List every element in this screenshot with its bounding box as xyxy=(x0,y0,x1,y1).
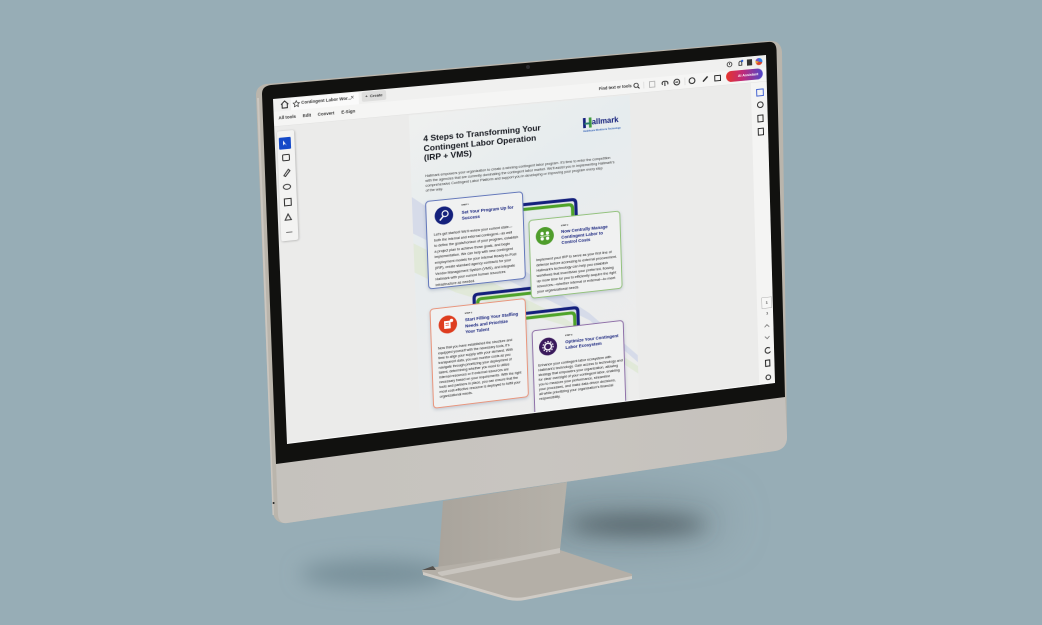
selected tool xyxy=(279,137,291,150)
avatar xyxy=(755,58,763,65)
top tab bar xyxy=(273,55,766,112)
step heading: Control Costs xyxy=(561,237,590,245)
card: step 1 xyxy=(425,191,526,290)
logo H mark xyxy=(582,117,592,128)
create tab xyxy=(362,90,386,102)
step text: Vendor Management System (VMS), and integrate xyxy=(435,263,515,276)
step heading: Success xyxy=(462,214,480,220)
step text: workflows that incentivize your preferred, flowing xyxy=(537,265,614,278)
card: step 3 xyxy=(429,298,529,409)
page number box xyxy=(761,297,772,309)
step text: Hallmark's technology can help you establish xyxy=(536,261,608,273)
step heading: Optimize Your Contingent xyxy=(565,333,618,344)
step label: STEP 3 xyxy=(465,311,472,315)
webcam xyxy=(526,65,530,69)
step text: transparent data, you can monitor costs as you xyxy=(438,353,511,365)
floor shadows xyxy=(300,498,725,588)
step text: employment models for your Internal Ready-to-Post xyxy=(435,252,517,265)
monitor body xyxy=(256,41,787,523)
intro paragraph: of the way. xyxy=(426,187,443,193)
step text: Hallmark's technology. Gain access to technology and xyxy=(538,358,623,372)
connector arrows xyxy=(426,198,580,326)
step heading: Set Your Program Up for xyxy=(461,205,514,215)
step text: Implement your IRP to serve as your first line of xyxy=(536,250,612,262)
icon: star xyxy=(292,100,300,108)
find text: Find text or tools xyxy=(599,83,632,91)
step heading: Contingent Labor to xyxy=(561,230,603,239)
step text: to define the goals/horizon of your program, establish xyxy=(434,235,518,248)
step text: time to align your supply with your demand. With xyxy=(438,348,513,360)
step heading xyxy=(441,212,608,299)
step text: strategy that empowers your organization, allowing xyxy=(538,363,618,377)
menu bar: Convert xyxy=(318,110,334,117)
navigation icons xyxy=(764,324,772,380)
step text: a project plan to achieve those goals, and begin xyxy=(434,241,510,254)
step text xyxy=(434,212,518,287)
step text: for clear oversight of your contingent labor, enabling xyxy=(539,368,620,382)
step label: STEP 2 xyxy=(561,224,568,227)
step text: Hallmark with your current human resources xyxy=(435,269,505,281)
icon: home xyxy=(280,100,289,109)
create tab: + Create xyxy=(365,93,383,99)
right rail xyxy=(751,81,775,385)
title: 4 Steps to Transforming Your xyxy=(423,123,541,143)
step text: your organizational needs. xyxy=(537,285,579,294)
step text: navigate through prioritizing your deployment of xyxy=(439,358,512,370)
step heading xyxy=(565,333,619,350)
decorative background stripes xyxy=(412,198,638,374)
step heading xyxy=(461,205,514,220)
step heading: Now Centrally Manage xyxy=(561,224,608,234)
tab close: × xyxy=(350,94,354,101)
step heading: Start Filling Your Staffing xyxy=(465,311,518,322)
step text xyxy=(441,212,617,299)
step heading: Your Talent xyxy=(465,327,489,334)
step text: responsibility. xyxy=(539,394,561,401)
tool icons xyxy=(282,154,292,233)
step text: equipped yourself with the necessary tools, it's xyxy=(438,344,510,355)
monitor stand xyxy=(422,482,632,601)
title xyxy=(423,123,541,163)
step text: resources—whether internal or external—to meet xyxy=(537,276,615,289)
step heading xyxy=(441,212,518,334)
title: Contingent Labor Operation xyxy=(423,133,536,153)
tab title: Contingent Labor Wor... xyxy=(301,95,351,105)
active tab xyxy=(291,92,359,110)
step text: defense before accessing to external procurement. xyxy=(536,254,617,267)
logo wordmark: allmark xyxy=(592,116,619,126)
menu bar: Edit xyxy=(303,113,311,118)
page count: 1 xyxy=(766,311,768,315)
card: step 4 xyxy=(532,320,627,424)
AI assistant button: AI Assistant xyxy=(738,72,758,78)
icon: help clock xyxy=(726,62,732,68)
step text: necessary based on your requirements. With the right xyxy=(439,371,521,384)
icon: gear badge xyxy=(539,337,557,356)
step text: both the internal and external contingent—as well xyxy=(434,230,512,242)
step text: tools and partners in place, you can ensure that the xyxy=(439,376,518,389)
step text: organizational needs. xyxy=(440,391,473,399)
step text: Let's get started! We'll review your current state— xyxy=(434,224,512,237)
step text: talent, determining whether you need to utilize xyxy=(439,363,510,375)
step heading: Labor Ecosystem xyxy=(565,341,602,350)
logo tagline: Healthcare Workforce Technology xyxy=(583,127,621,133)
icon: apps xyxy=(747,59,752,66)
page number box: 1 xyxy=(766,300,768,305)
card: step 2 xyxy=(528,211,623,299)
window icons xyxy=(726,58,762,68)
right rail icons xyxy=(756,88,764,136)
intro paragraph: Hallmark empowers your organization to create a winning contingent labor program. It's time to enter the competition xyxy=(425,155,610,178)
step label: STEP 4 xyxy=(565,333,572,337)
icon: magnifier badge xyxy=(434,206,453,225)
toolbar icons xyxy=(633,74,721,89)
intro paragraph: comprehensive Contingent Labor Platform and support you in developing or improving your program every step xyxy=(425,166,603,188)
menu items: All tools xyxy=(278,114,296,120)
step text: you to measure your performance, streamline xyxy=(539,374,610,387)
step text: Now that you have established the structure and xyxy=(438,339,512,351)
intro paragraph: with the agencies that are currently dominating the contingent labor market. We'll assist you in implementing Hallmark's xyxy=(425,160,615,183)
step text: all while prioritizing your organization's financial xyxy=(539,383,613,396)
step text: your processes, and make data-driven decisions, xyxy=(539,378,616,391)
step text: internal resources or if external resources are xyxy=(439,368,509,380)
step text xyxy=(438,338,522,399)
logo: Hallmark xyxy=(582,116,621,133)
step text: up more time for you to efficiently acquire the right xyxy=(537,270,616,283)
intro paragraph xyxy=(425,155,615,193)
step text: most cost-effective resource is deployed to fulfill your xyxy=(439,381,521,394)
icon: bell xyxy=(738,60,744,66)
step heading: Needs and Prioritize xyxy=(465,319,508,328)
step text: infrastructure as needed. xyxy=(436,278,475,287)
menu bar: E-Sign xyxy=(341,108,355,115)
icon: people badge xyxy=(535,226,554,246)
step text: implementation. We can help with new contingent xyxy=(435,246,513,259)
left tool rail xyxy=(277,130,298,241)
AI assistant button xyxy=(726,68,763,82)
document page xyxy=(409,95,639,427)
step label: STEP 1 xyxy=(461,203,469,206)
screen: PDF viewer xyxy=(273,55,775,444)
step text: (IRP), create standard agency contracts for your xyxy=(435,258,511,270)
menu bar xyxy=(274,67,767,127)
step text xyxy=(538,340,623,401)
icon: checklist badge xyxy=(438,314,457,334)
title: (IRP + VMS) xyxy=(424,149,472,163)
step text: Enhance your contingent labor ecosystem with xyxy=(538,355,611,368)
